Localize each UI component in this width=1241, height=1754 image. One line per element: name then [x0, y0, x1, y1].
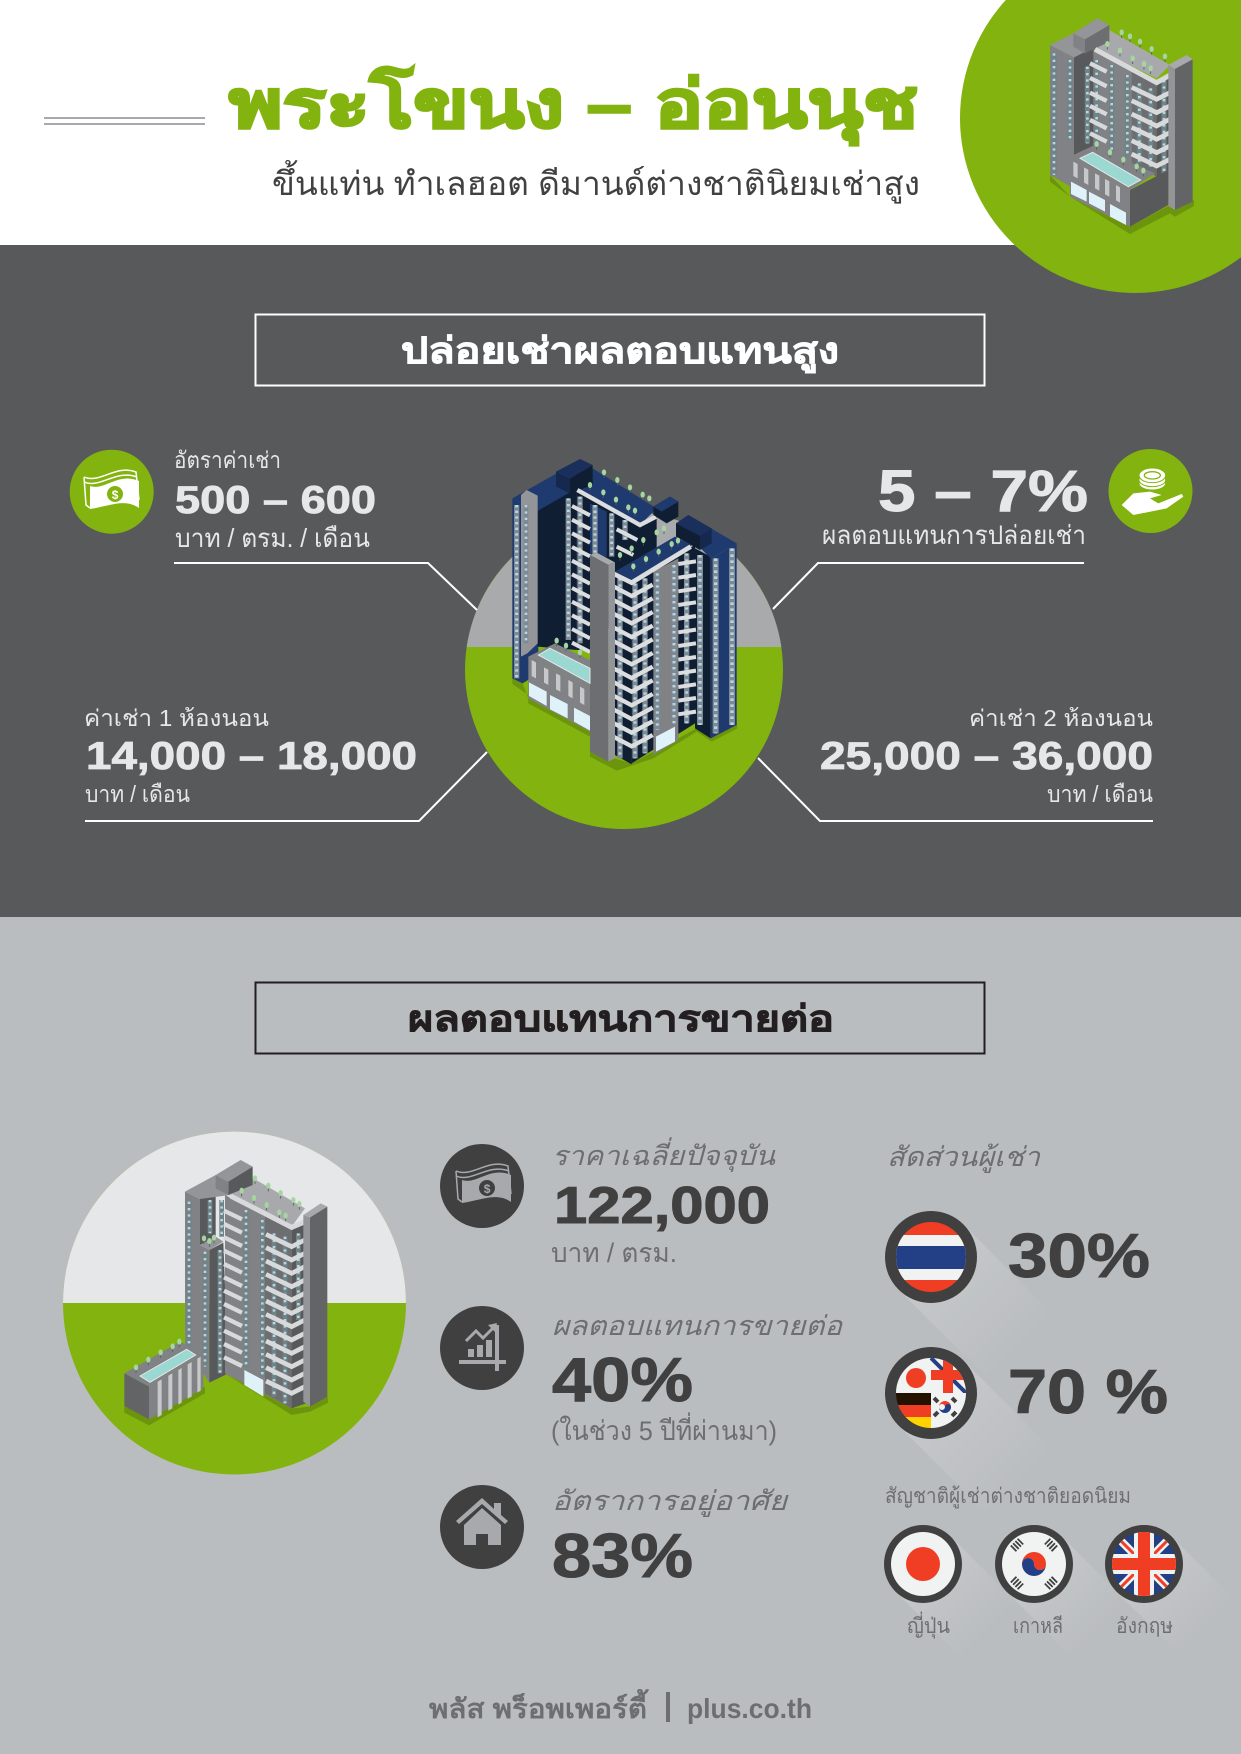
text: average price	[551, 1137, 777, 1268]
text: resale return	[551, 1311, 844, 1446]
text: two bedroom rent: ค่าเช่า 2 ห้องนอน	[969, 705, 1153, 731]
icon: money on green circle: $	[112, 488, 119, 502]
footer: พลัส พร็อพเพอร์ตี้	[429, 1688, 650, 1724]
icon: money on green circle	[70, 450, 154, 534]
icon: growth chart on dark circle	[440, 1306, 524, 1390]
text: tenant proportion heading: สัดส่วนผู้เช่า	[887, 1142, 1041, 1174]
icon: money on dark circle	[440, 1144, 524, 1228]
icon: grey condo tower	[124, 1160, 328, 1425]
text: occupancy: อัตราการอยู่อาศัย	[552, 1486, 789, 1518]
text: rent rate: อัตราค่าเช่า	[174, 447, 281, 473]
text: two bedroom rent: บาท / เดือน	[1047, 781, 1153, 807]
text: one bedroom rent	[84, 705, 417, 807]
icon: house on dark circle	[440, 1485, 524, 1569]
text: one bedroom rent: บาท / เดือน	[85, 781, 190, 807]
footer	[429, 1688, 812, 1724]
icon: Japan flag	[884, 1525, 1030, 1671]
icon: Thai flag	[885, 1211, 990, 1316]
text: rent rate: บาท / ตรม. / เดือน	[175, 523, 370, 553]
text: rental yield: ผลตอบแทนการปล่อยเช่า	[822, 520, 1086, 550]
header decoration: double line	[44, 118, 205, 124]
icon: navy condo building	[512, 459, 737, 771]
nationality labels: ญี่ปุ่น	[907, 1611, 950, 1639]
text: one bedroom rent: 14,000 – 18,000	[86, 735, 417, 778]
text: rent rate	[174, 447, 376, 553]
nationality labels: อังกฤษ	[1116, 1615, 1173, 1638]
text: average price: บาท / ตรม.	[551, 1238, 677, 1268]
text: 70 percent: 70 %	[1008, 1358, 1168, 1427]
text: two bedroom rent	[820, 705, 1153, 807]
title: พระโขนง – อ่อนนุช	[229, 65, 918, 146]
text: two bedroom rent: 25,000 – 36,000	[820, 735, 1153, 778]
text: rent rate: 500 – 600	[175, 479, 376, 522]
text: average price: 122,000	[554, 1177, 770, 1235]
nationality labels: เกาหลี	[1013, 1615, 1063, 1638]
icon: South Korea flag	[995, 1525, 1141, 1671]
connector lines	[85, 563, 1153, 821]
header green circle	[960, 0, 1241, 293]
section heading: resale return: ผลตอบแทนการขายต่อ	[408, 998, 834, 1039]
background: white header	[0, 0, 1241, 245]
background: grey lower section	[0, 917, 1241, 1754]
section heading: rental return	[256, 314, 984, 386]
icon: money on dark circle: $	[484, 1182, 491, 1196]
text: resale return: ผลตอบแทนการขายต่อ	[552, 1311, 844, 1341]
text: 30 percent: 30%	[1008, 1222, 1150, 1291]
left circle with grey building	[63, 1132, 406, 1474]
text: resale return: 40%	[552, 1346, 693, 1415]
text: popular nationalities heading: สัญชาติผู้เช่าต่างชาติยอดนิยม	[885, 1485, 1131, 1509]
section heading: resale return	[256, 982, 984, 1054]
text: one bedroom rent: ค่าเช่า 1 ห้องนอน	[84, 705, 269, 731]
icon: UK flag	[1105, 1525, 1187, 1609]
centre circle with navy building	[465, 459, 783, 829]
section heading: rental return: ปล่อยเช่าผลตอบแทนสูง	[401, 330, 839, 374]
icon: grey condo building in header	[1050, 18, 1194, 234]
text: rental yield	[822, 459, 1088, 550]
subtitle: ขึ้นแท่น ทำเลฮอต ดีมานด์ต่างชาตินิยมเช่าสูง	[272, 160, 920, 204]
text: occupancy	[552, 1486, 789, 1591]
icon: mixed flags	[885, 1347, 990, 1452]
text: rental yield: 5 – 7%	[878, 459, 1088, 524]
footer: plus.co.th	[687, 1693, 812, 1724]
text: average price: ราคาเฉลี่ยปัจจุบัน	[552, 1137, 777, 1173]
background: dark middle section	[0, 245, 1241, 917]
icon: hand holding coins on green circle	[1108, 449, 1192, 533]
nationality labels	[907, 1611, 1173, 1639]
text: occupancy: 83%	[552, 1522, 693, 1591]
text: resale return: (ในช่วง 5 ปีที่ผ่านมา)	[551, 1412, 777, 1446]
